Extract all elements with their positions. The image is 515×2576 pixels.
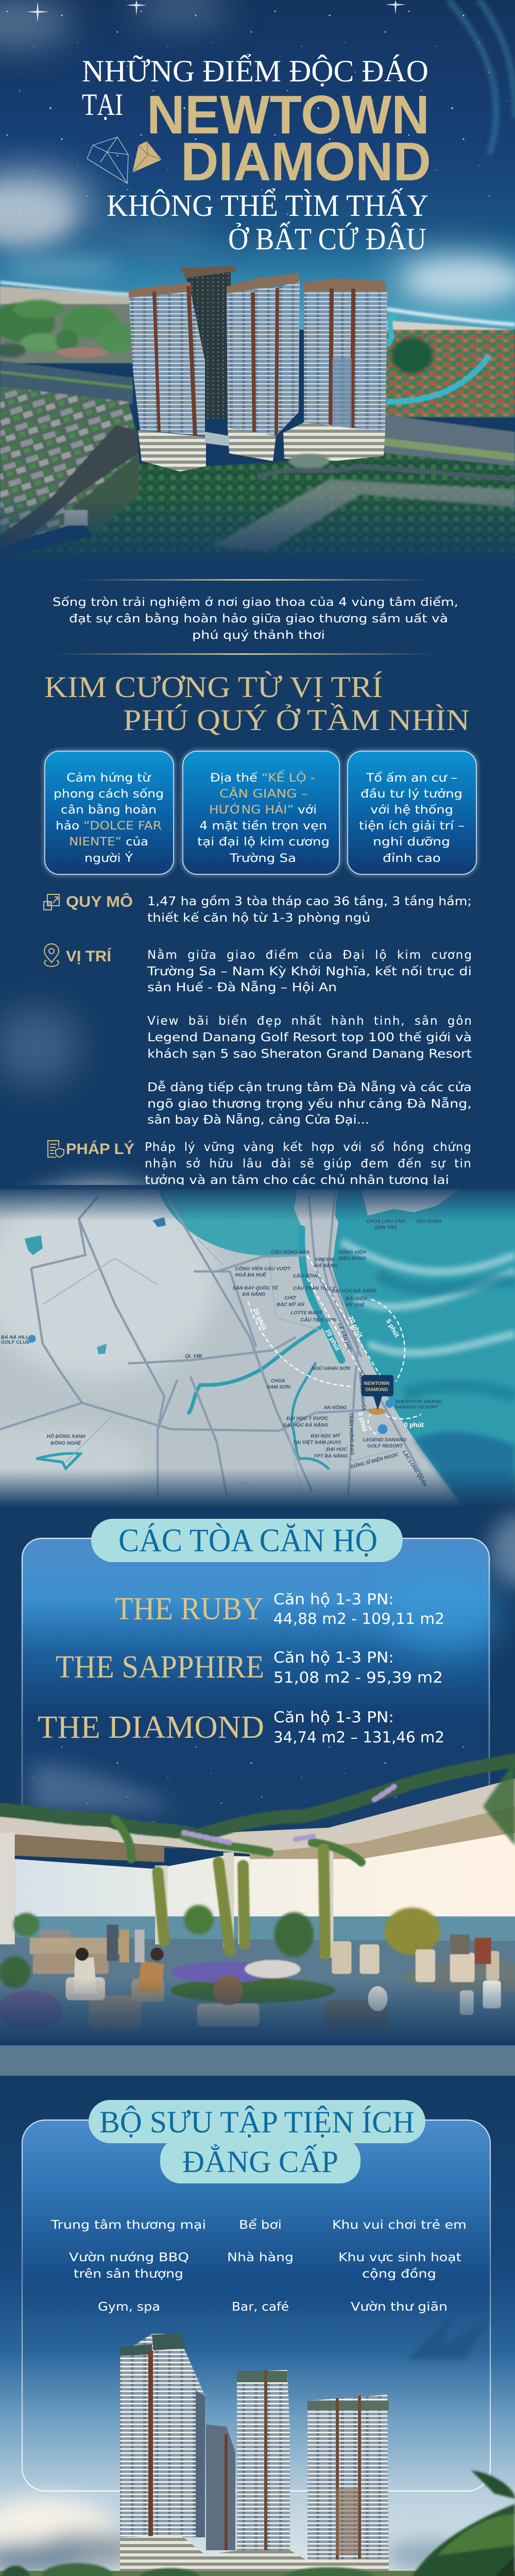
amenities list: Khu vui chơi trẻ em (332, 2218, 467, 2232)
panel: three highlight cards (45, 751, 476, 874)
map pin newtown diamond: DIAMOND (365, 1387, 388, 1392)
map labels: DŨNG SĨ ĐIỆN NGỌC (350, 1451, 399, 1470)
rooftop bottom fade (0, 1978, 515, 2045)
label phap ly: PHÁP LÝ (66, 1140, 134, 1158)
map: 0 phút (356, 1411, 369, 1433)
text vi tri: Trường Sa – Nam Kỳ Khởi Nghĩa, kết nối trục di (147, 965, 472, 978)
card 2: 4 mặt tiền trọn vẹn (199, 820, 327, 833)
text phap ly: Pháp lý vững vàng kết hợp với sổ hồng chứng (145, 1141, 471, 1154)
map labels: MŨI SỪNG (417, 1218, 442, 1224)
amenities list: Khu vực sinh hoạt (338, 2251, 461, 2264)
row: the sapphire: 51,08 m2 - 95,39 m2 (273, 1669, 443, 1686)
amenities list: trên sân thượng (74, 2267, 183, 2281)
row: the ruby: THE RUBY (115, 1591, 264, 1626)
panel: amenities background sky (0, 2102, 515, 2576)
title line 1: NHỮNG ĐIỂM ĐỘC ĐÁO (82, 54, 428, 88)
card 1: cân bằng hoàn (61, 804, 157, 817)
text quy mo: 1,47 ha gồm 3 tòa tháp cao 36 tầng, 3 tầng hầm; (147, 895, 472, 908)
row: the ruby (115, 1590, 444, 1628)
map labels: GOLF CLUB (1, 1340, 30, 1345)
map labels: CÔNG VIÊN (338, 1249, 367, 1255)
card 3: đầu tư lý tưởng (360, 788, 462, 801)
map: 5 phút (385, 1318, 401, 1339)
intro text: Sống tròn trải nghiệm ở nơi giao thoa của 4 vùng tâm điểm, (53, 596, 458, 609)
card 2: tại đại lộ kim cương (197, 836, 330, 849)
map labels: ĐẠI HỌC (327, 1447, 347, 1452)
amenities list: Trung tâm thương mại (50, 2218, 206, 2232)
intro text (53, 596, 458, 642)
map pin newtown diamond (362, 1375, 393, 1415)
text vi tri: khách sạn 5 sao Sheraton Grand Danang Resort (147, 1047, 472, 1061)
map labels: VINCOM (315, 1257, 335, 1262)
title word tại: TẠI (82, 88, 123, 122)
text vi tri: sân bay Đà Nẵng, cảng Cửa Đại... (147, 1112, 369, 1127)
cloud lower left (0, 1007, 80, 1084)
map labels: ĐẠI HỌC MỸ (311, 1433, 341, 1439)
card 1: phong cách sống (54, 788, 164, 801)
divider top (77, 579, 433, 581)
map labels: BÃI BIỂN (346, 1295, 368, 1301)
map labels: ĐỒNG NGHỆ (50, 1440, 81, 1446)
text phap ly: tưởng và an tâm cho các chủ nhân tương lai (145, 1174, 449, 1187)
row: the diamond: THE DIAMOND (38, 1710, 264, 1745)
card 3 (348, 751, 476, 874)
card 3: với hệ thống (370, 804, 453, 817)
icon: outline diamond (87, 137, 128, 183)
roads (0, 1193, 424, 1495)
pill heading: bo suu tap tien ich dang cap: ĐẲNG CẤP (182, 2145, 338, 2179)
heading: kim cuong tu vi tri: PHÚ QUÝ Ở TẦM NHÌN (123, 703, 470, 737)
hero sky and sea background (0, 0, 515, 330)
map labels: ĐẠI HỌC ĐÀ NẴNG (332, 1288, 377, 1294)
label vi tri: VỊ TRÍ (66, 947, 112, 965)
amenities ground, road and palm (0, 2470, 515, 2576)
divider bottom (52, 653, 438, 655)
map labels: NAM SƠN (267, 1384, 291, 1390)
brand name diamond: DIAMOND (181, 131, 431, 192)
map labels: CẦU TIÊN SƠN (301, 1317, 337, 1323)
row: the ruby: 44,88 m2 - 109,11 m2 (273, 1610, 444, 1628)
hero bottom fade (0, 495, 515, 569)
brand name newtown: NEWTOWN (147, 84, 430, 145)
icon: legal document (48, 1141, 64, 1157)
map labels: ĐẠI HỌC Y DƯỢC (286, 1416, 328, 1421)
map labels: CÔNG VIÊN CẦU VƯỢT (235, 1265, 291, 1272)
panel: apartments (22, 1515, 515, 1848)
map labels (1, 1218, 442, 1488)
map labels: TẠI VIỆT NAM (AUV) (293, 1439, 341, 1446)
night sky stars (22, 1747, 489, 1834)
text vi tri: Dễ dàng tiếp cận trung tâm Đà Nẵng và các cửa (147, 1080, 472, 1094)
heading: kim cuong tu vi tri: KIM CƯƠNG TỪ VỊ TRÍ (44, 670, 383, 704)
map labels: CHÙA (271, 1378, 285, 1384)
rooftop image (0, 1760, 515, 2076)
text vi tri: sản Huế - Đà Nẵng – Hội An (147, 980, 337, 994)
map labels: CHỢ (284, 1295, 296, 1301)
pill heading: bo suu tap tien ich dang cap (89, 2100, 425, 2183)
text vi tri: View bãi biển đẹp nhất hành tinh, sân gôn (147, 1014, 472, 1028)
map labels: SƠN TRÀ (374, 1225, 397, 1231)
sea (332, 1189, 515, 1511)
amenities list: Bar, café (232, 2300, 289, 2314)
map: 0 phút (404, 1421, 424, 1429)
amenities list: cộng đồng (362, 2267, 436, 2281)
map labels: ĐÀ NẴNG (315, 1263, 338, 1269)
map labels: CHÙA LINH ỨNG (366, 1218, 406, 1224)
text vi tri: Nằm giữa giao điểm của Đại lộ kim cương (147, 948, 472, 962)
row: the sapphire: Căn hộ 1-3 PN: (273, 1649, 394, 1666)
text vi tri (147, 948, 472, 1127)
card 3: Tổ ấm an cư – (366, 772, 457, 785)
text vi tri: ngõ giao thương trọng yếu như cảng Đà Nẵng, (147, 1096, 472, 1111)
rooftop furniture and people (29, 1925, 501, 2033)
map labels: CẦU RỒNG (293, 1273, 320, 1279)
building towers (129, 266, 387, 471)
map labels: BẮC MỸ AN (277, 1302, 305, 1308)
map labels: TRẦN HƯNG ĐẠO (348, 1413, 355, 1455)
map labels: BÀ NÀ HILL (1, 1335, 29, 1341)
map labels: MỸ KHÊ (346, 1302, 365, 1308)
map: 20 phút (324, 1328, 342, 1352)
intro text: đạt sự cân bằng hoàn hảo giữa giao thương sầm uất và (69, 613, 448, 625)
row: the diamond: 34,74 m2 – 131,46 m2 (273, 1728, 444, 1746)
hero section (0, 0, 515, 569)
map labels: NGÃ BA HUẾ (235, 1272, 266, 1278)
map: 20 phút (347, 1315, 365, 1339)
row: the sapphire (56, 1649, 443, 1686)
rooftop garden (0, 1960, 335, 2030)
map labels: LẠC LONG QUÂN (401, 1449, 428, 1488)
rooftop canopy (0, 1778, 515, 1958)
map labels: FPT ĐÀ NẴNG (314, 1453, 348, 1459)
amenities list (50, 2218, 467, 2314)
amenities list: Nhà hàng (227, 2251, 294, 2264)
rooftop vines (0, 1760, 515, 1954)
map (0, 1183, 515, 1511)
map labels: QL 14B (185, 1353, 202, 1359)
palm right (402, 2470, 515, 2576)
row: the sapphire: THE SAPPHIRE (56, 1650, 264, 1685)
map bottom fade (0, 1468, 515, 1507)
faint palm in sky (407, 2313, 489, 2360)
rivers (36, 1229, 341, 1469)
icon: scale (44, 894, 59, 910)
map top fade (0, 1185, 515, 1221)
heading: kim cuong tu vi tri (44, 670, 470, 737)
map labels: ĐÀ NẴNG (243, 1291, 266, 1297)
title line 3: KHÔNG THỂ TÌM THẤY (107, 189, 428, 223)
card 2: HƯỚNG HẢI” với (209, 803, 317, 817)
starbursts (26, 0, 406, 22)
beach and ground image (0, 282, 515, 559)
amenities towers (120, 2333, 389, 2576)
title line 4: Ở BẤT CỨ ĐÂU (228, 222, 426, 256)
amenities list: Gym, spa (98, 2300, 160, 2314)
map dashed routes (248, 1256, 421, 1434)
pill heading: cac toa can ho: CÁC TÒA CĂN HỘ (118, 1522, 377, 1558)
map labels: LÊ VĂN HIẾN (337, 1323, 353, 1354)
map labels: CẦU SÔNG HÀN (271, 1249, 310, 1255)
text quy mo (147, 895, 472, 925)
text phap ly: nhận sở hữu lâu dài sẽ giúp đem đến sự tin (145, 1157, 471, 1171)
map labels: GOLF RESORT (367, 1444, 403, 1449)
map labels: CẦU TRẦN THỊ LÝ (293, 1286, 336, 1292)
card 1: hảo “DOLCE FAR (56, 820, 162, 833)
pill heading: bo suu tap tien ich dang cap: BỘ SƯU TẬP TIỆN ÍCH (99, 2105, 415, 2139)
panel: amenities (22, 2100, 490, 2491)
map labels: NGŨ HÀNH SƠN (312, 1366, 351, 1371)
card 1: Cảm hứng từ (66, 772, 151, 785)
rooftop trees (0, 1905, 440, 1988)
map labels: LEGEND DANANG (363, 1437, 407, 1443)
label quy mo: QUY MÔ (66, 893, 133, 910)
row: the ruby: Căn hộ 1-3 PN: (273, 1590, 394, 1608)
map pin newtown diamond: NEWTOWN (364, 1381, 390, 1386)
icon: gold diamond (132, 141, 162, 173)
card 3: đỉnh cao (383, 852, 441, 865)
card 1: NIENTE” của (69, 836, 148, 849)
card 1: người Ý (84, 852, 133, 865)
card 3: tiện ích giải trí – (359, 820, 465, 833)
card 2 (183, 751, 339, 874)
intro text: phú quý thảnh thơi (192, 629, 325, 642)
map labels: DANANG RESORT (395, 1404, 439, 1410)
map labels: TRẦN ĐẠI NGHĨA (357, 1370, 366, 1411)
card 1 (45, 751, 174, 874)
text phap ly (145, 1141, 471, 1187)
map labels: SÂN BAY QUỐC TẾ (233, 1285, 278, 1291)
map labels: SHERATON GRAND (395, 1399, 442, 1405)
bay (158, 1189, 307, 1256)
amenities list: Vườn nướng BBQ (69, 2251, 189, 2264)
row: the diamond (38, 1708, 444, 1746)
card 2: CẬN GIANG – (219, 787, 308, 801)
card 2: Trường Sa (229, 852, 296, 865)
text vi tri: Legend Danang Golf Resort top 100 thế giới và (147, 1031, 472, 1044)
icon: location pin (44, 944, 59, 967)
map: 20 phút (251, 1307, 268, 1331)
amenities list: Bể bơi (239, 2218, 282, 2232)
map labels: AN NÔNG (323, 1404, 347, 1411)
map labels: LOTTE MART (290, 1310, 323, 1316)
amenities list: Vườn thư giãn (351, 2300, 448, 2314)
map labels: HỒ ĐỒNG XANH (47, 1433, 86, 1439)
map labels: ĐẠI HỌC ĐÀ NẴNG (283, 1422, 329, 1428)
map labels: BIỂN ĐÔNG (338, 1256, 367, 1262)
card 3: nghỉ dưỡng (373, 836, 450, 849)
row: the diamond: Căn hộ 1-3 PN: (273, 1708, 394, 1726)
clouds behind towers (0, 2499, 474, 2573)
text quy mo: thiết kế căn hộ từ 1-3 phòng ngủ (147, 911, 370, 925)
card 2: Địa thế “KẾ LỘ - (210, 770, 315, 785)
